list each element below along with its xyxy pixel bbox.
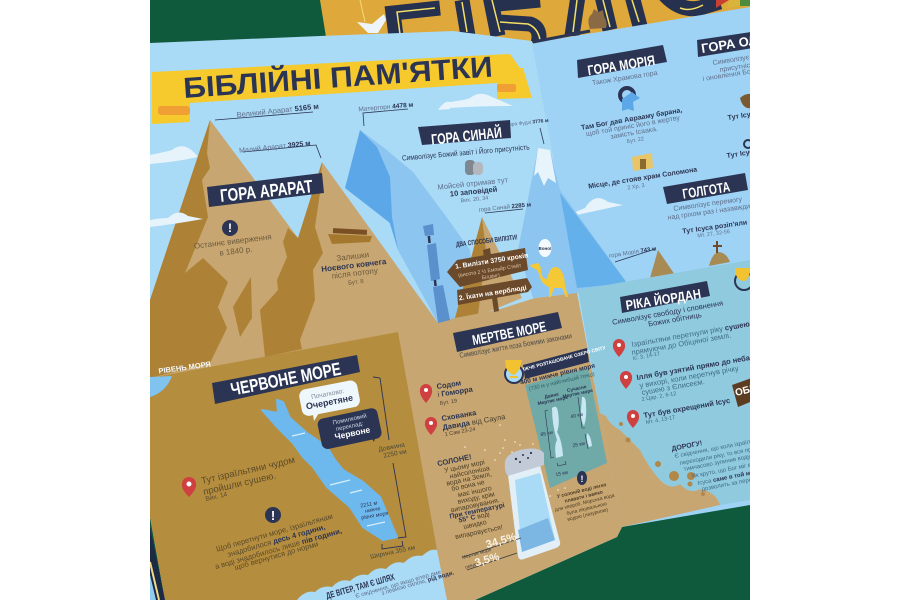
panel: Dead Sea xyxy=(420,312,615,571)
text: baptism: Мт. 4, 13-17 xyxy=(645,415,676,426)
text: crucifixion: Мт. 27, 32-56 xyxy=(697,229,730,239)
bubble: mistranslated: Помилковий xyxy=(332,413,367,427)
heading: two ways to climb: ДВА СПОСОБИ ВИЛІЗТИ! xyxy=(456,234,518,249)
text: Noah's ark remains: Ноєвого ковчега xyxy=(321,257,387,274)
label: Moriah height: гора Морія 743 м xyxy=(609,246,657,260)
pin: Sodom xyxy=(420,384,432,403)
text: salty: бо вона не xyxy=(451,478,486,493)
text: salt water note: водою (лазурною) xyxy=(567,507,609,523)
label: Fuji height: гора Фудзі 3776 м xyxy=(507,118,549,128)
text: salty: У цьому морі xyxy=(443,458,486,475)
text: David's hideout: Схованка xyxy=(441,408,478,423)
right page sky xyxy=(532,7,750,527)
title: БІБЛІЙНІ ПАМ'ЯТКИ xyxy=(182,49,494,105)
text: salty: випаровується! xyxy=(455,524,504,541)
text: Abraham's ram: Бут. 22 xyxy=(626,136,645,145)
green table background xyxy=(150,0,750,600)
icon: exclamation Dead Sea: ! xyxy=(580,474,584,484)
stat: Dead Sea salinity xyxy=(461,531,521,561)
text: salty: швидко xyxy=(463,519,488,531)
text: Noah's ark remains: Залишки xyxy=(336,250,370,263)
text: Solomon's temple: 2 Хр. 3 xyxy=(627,183,645,192)
text: Abraham's ram: щоб той приніс його в жертву xyxy=(585,114,681,138)
text: Abraham's ram xyxy=(580,106,687,153)
chart: ancient Dead Sea: 15 км xyxy=(555,470,569,478)
mountain height labels xyxy=(215,109,655,262)
stat: Dead Sea salinity: 34,5% xyxy=(485,531,518,551)
text: Sodom: Бут. 19 xyxy=(439,398,457,407)
banner: Golgotha: ГОЛГОТА xyxy=(681,178,731,202)
text: salty: вода на Землі, xyxy=(446,470,493,488)
text: Israelites crossed: Ізраїльтяни перетнули ріку сушею, xyxy=(631,319,752,349)
text: Jesus here: Тут Ісус xyxy=(727,111,755,122)
text: Moses commandments xyxy=(437,175,511,207)
pin 3 xyxy=(627,410,639,428)
icon: salt shaker xyxy=(505,449,560,560)
cloud over Ararat xyxy=(150,212,203,227)
text: Dead Sea symbolism: Символізує життя поза Божими законами xyxy=(459,331,572,360)
brown tag xyxy=(732,375,760,407)
bubble: originally xyxy=(298,379,361,421)
panel: where there is wind: з певною силою, рід води. xyxy=(381,570,455,597)
text: baptism: Тут був охрещений Ісус xyxy=(643,396,731,420)
text: Abraham's ram: Там Бог дав Аврааму барана, xyxy=(580,106,683,132)
banner: Mount of Olives: ГОРА ОЛИВНА xyxy=(700,26,796,56)
signpost: Білдінг) xyxy=(481,273,501,281)
text: crossed on dry land: Вих. 14 xyxy=(205,491,228,503)
text: salty: має іншого xyxy=(457,484,493,499)
text: crossing time: знадобилося десь 4 години, xyxy=(226,522,326,559)
text: salty: випаровування. xyxy=(450,497,501,514)
panel: Jordan river xyxy=(578,260,770,527)
icon: trophy xyxy=(505,360,523,383)
level label: sea level: РІВЕНЬ МОРЯ xyxy=(158,359,211,376)
text: crossed on dry land: пройшли сушею. xyxy=(202,470,277,498)
stat: ocean salinity: 3,5% xyxy=(473,551,501,569)
length dimension: 2250 км xyxy=(383,448,408,460)
text: Golgotha symbolism: над гріхом раз і назавжди xyxy=(667,202,751,222)
note: road xyxy=(671,436,770,493)
bubble: mistranslated: Червоне xyxy=(334,424,371,442)
note: road: Як круто, що Бог міг вчинити xyxy=(691,459,770,480)
text: Elijah: сушею з Єлисеєм. xyxy=(641,377,705,397)
text: Moses commandments: Вих. 20, 34 xyxy=(460,195,489,204)
text: Israelites crossed: прямуючи до Обіцяної землі. xyxy=(631,331,732,357)
icon: exclamation Ararat: ! xyxy=(228,221,232,235)
text: Israelites crossed: Іс. 3, 14-17 xyxy=(632,351,660,362)
text: Elijah xyxy=(636,353,751,403)
text: Golgotha symbolism: Символізує перемогу xyxy=(673,195,743,213)
text: salty: 55° С воді xyxy=(458,510,491,525)
banner: Red Sea: ЧЕРВОНЕ МОРЕ xyxy=(229,359,343,400)
text: salty: найсолоніша xyxy=(449,464,491,480)
text: Mount of Olives symbolism: і оновлення Божого xyxy=(702,65,766,83)
text: crossing time: а воді знадобилось лише пів години, xyxy=(214,526,343,571)
clouds xyxy=(150,94,623,218)
stat: ocean salinity xyxy=(464,551,517,571)
water cove xyxy=(150,376,172,397)
icon: exclamation Ararat xyxy=(222,220,238,236)
text: Sodom: Содом xyxy=(436,378,462,391)
title banner xyxy=(152,49,532,124)
bubble: originally: Очеретяне xyxy=(305,393,354,412)
brown tag: ОБІ xyxy=(734,384,754,399)
label: Matterhorn height: Матергорн 4478 м xyxy=(358,102,414,113)
note: road: ДОРОГУ! xyxy=(671,440,703,453)
icon: cup xyxy=(744,140,752,148)
width dimension: Ширина 355 км xyxy=(370,544,416,561)
text: Noah's ark remains xyxy=(320,248,389,290)
chart: modern Dead Sea: Сучасне xyxy=(567,385,587,394)
icon: ark xyxy=(328,228,372,244)
chart: ancient Dead Sea: 85 км xyxy=(540,430,554,438)
note: road: Є свідчення, що коли ізраїльтяни xyxy=(674,436,766,460)
text: Golgotha symbolism xyxy=(666,194,751,222)
Mount Ararat dark faces xyxy=(150,120,323,378)
text: salt water note: була лікувальною xyxy=(566,501,608,517)
chart: ancient Dead Sea: Давнє xyxy=(544,393,560,400)
text: last eruption: Останнє виверження xyxy=(193,232,272,251)
note: road: тимчасово зупинив воду. xyxy=(683,454,752,473)
chart: modern Dead Sea xyxy=(561,383,594,449)
text: Elijah: Ілля був узятий прямо до неба xyxy=(636,353,751,382)
icon: temple xyxy=(632,153,653,171)
text: salt water note: плавати і важко xyxy=(564,489,604,505)
note: road: дозволить за перетину xyxy=(701,475,765,493)
pin: David xyxy=(425,417,437,435)
text: salty xyxy=(436,452,506,541)
small mountains xyxy=(650,241,730,278)
text: Jesus here: Тут Ісус xyxy=(726,149,754,160)
chart: modern Dead Sea: 25 км xyxy=(572,441,586,449)
bubble: originally: Початково: xyxy=(311,388,345,401)
text: Elijah: 2 Цар. 2, 6-12 xyxy=(641,391,677,403)
icon: tablets xyxy=(465,160,483,175)
stat: ocean salinity: океан xyxy=(464,561,479,571)
panel: where there is wind: ДЕ ВІТЕР, ТАМ Є ШЛЯХ xyxy=(325,572,396,600)
length dimension: Довжина xyxy=(378,442,405,454)
text: Abraham's ram: замість Ісаака. xyxy=(610,125,658,141)
salt specks xyxy=(464,424,566,497)
map: Red Sea xyxy=(262,400,397,540)
label: Small Ararat height: Малий Арарат 3925 м xyxy=(239,139,311,155)
text: Noah's ark remains: Бут. 8 xyxy=(348,279,365,287)
signpost: 2. Їхати на верблюді xyxy=(458,284,527,302)
icon: camel: Воно! xyxy=(539,246,552,251)
text: crucifixion xyxy=(682,219,748,241)
text: Moses commandments: 10 заповідей xyxy=(449,184,498,198)
label: Big Ararat height: Великий Арарат 5165 м xyxy=(236,102,320,119)
book page edge stripes xyxy=(150,527,165,600)
icon: camel xyxy=(530,239,568,297)
label: Mount Sinai height: гора Синай 2285 м xyxy=(478,201,532,214)
signpost: (висота 2 ½ Емпайр Стейт xyxy=(458,262,522,279)
text: 400 m below: 400 м нижче рівня моря xyxy=(519,362,596,387)
text: Sinai symbolism: Символізує Божий завіт і Його присутність xyxy=(402,142,530,163)
text: Mount of Olives symbolism xyxy=(702,50,768,83)
text: crossing time: Щоб перетнути море, ізраїльтянам xyxy=(215,512,334,554)
text: Solomon's temple: Місце, де стояв храм Соломона xyxy=(588,165,698,191)
banner: Jordan: РІКА ЙОРДАН xyxy=(625,286,702,313)
text: salty: виходу, крім xyxy=(457,490,496,506)
length dimension xyxy=(373,377,408,538)
text: Elijah: у вихорі, коли перетнув річку xyxy=(639,364,740,390)
icon: exclamation Red Sea xyxy=(265,507,281,523)
banner: lowest lake: НАЙНИЖЧЕ РОЗТАШОВАНЕ ОЗЕРО СВІТУ xyxy=(507,343,607,377)
left page sky xyxy=(150,31,622,600)
Matterhorn blue mountain xyxy=(345,130,480,323)
text: Jordan symbolism: Божих обітниць xyxy=(647,310,702,329)
tower comparison icon xyxy=(423,224,450,323)
text: David's hideout: 1 Сам 23-24 xyxy=(444,427,476,438)
text: David's hideout xyxy=(441,408,507,438)
banner: Mount Moriah: ГОРА МОРІЯ xyxy=(586,52,656,78)
banner: Mount Sinai xyxy=(418,120,511,149)
text: salt water note: У солоній воді легко xyxy=(556,481,607,500)
banner: Dead Sea: МЕРТВЕ МОРЕ xyxy=(471,318,547,348)
text: crossed on dry land: Тут ізраїльтяни чудом xyxy=(200,455,296,487)
ground left page xyxy=(150,120,622,600)
chart: ancient Dead Sea: Мертве море xyxy=(537,395,569,407)
text: Sodom: і Гоморра xyxy=(437,384,474,399)
note: road: переходили ріку, то вся прямо xyxy=(679,445,763,467)
text: Jordan symbolism: Символізує свободу і сповнення xyxy=(611,298,724,327)
signpost: 1. Вилізти 3750 кроків xyxy=(455,251,529,271)
signpost xyxy=(447,248,532,312)
text: salt water note xyxy=(554,481,615,523)
Sinai small peak xyxy=(455,217,522,318)
text: Jesus here xyxy=(726,111,755,160)
map: Red Sea: 2211 м xyxy=(360,501,378,509)
note: road: Ісуса саме в той момент xyxy=(697,466,768,487)
pin: Red Sea xyxy=(182,477,196,497)
banner: Mount Ararat: ГОРА АРАРАТ xyxy=(219,176,314,206)
chart: modern Dead Sea: Мертве море xyxy=(562,388,594,400)
snowy blue mountain xyxy=(518,148,627,298)
panel: Red Sea xyxy=(150,332,437,600)
text: crucifixion: Тут Ісуса розіп'яли xyxy=(682,219,748,236)
panel: where there is wind xyxy=(297,550,455,600)
text: Noah's ark remains: після потопу xyxy=(331,266,378,281)
text: crossing time: щоб вернутися до норми xyxy=(233,539,319,572)
text: Sodom xyxy=(436,378,474,407)
text: salt water note: для хвороб. Морська вода xyxy=(554,493,615,513)
text: salty: СОЛОНЕ! xyxy=(436,452,472,468)
book cover behind xyxy=(320,0,750,44)
map: Red Sea: рівня моря xyxy=(361,511,389,521)
stat: Dead Sea salinity: Мертве море xyxy=(461,547,492,561)
icon: exclamation Dead Sea xyxy=(577,471,587,485)
panel: where there is wind: Є свідчення, що якщо вітер дме xyxy=(355,569,443,600)
map: Red Sea: нижче xyxy=(365,506,381,515)
text: David's hideout: Давида від Саула xyxy=(442,412,507,432)
text: last eruption: в 1840 р. xyxy=(219,245,253,258)
shore dots xyxy=(619,422,705,496)
chart: modern Dead Sea: 40 км xyxy=(570,412,584,420)
icon: exclamation Red Sea: ! xyxy=(271,508,275,523)
chart: ancient Dead Sea xyxy=(536,390,569,478)
pin 2 xyxy=(620,371,632,389)
banner: Golgotha xyxy=(663,173,748,204)
text: salty: При температурі xyxy=(449,501,506,521)
text: crossed on dry land xyxy=(200,455,296,503)
text: Temple Mount: Також Храмова гора xyxy=(592,70,658,87)
icon: ram xyxy=(620,88,640,111)
icon: bowl xyxy=(740,94,752,108)
text: Mount of Olives symbolism: присутність xyxy=(719,60,758,74)
pin 1 xyxy=(613,339,625,357)
text: Israelites crossed xyxy=(631,319,752,362)
trophy icon xyxy=(735,268,753,290)
bubble: mistranslated: переклад: xyxy=(335,421,364,433)
spine top edge xyxy=(533,31,590,42)
text: deepest point: (730 м у найглибшій точці) xyxy=(528,371,595,393)
banner: Red Sea xyxy=(212,355,360,404)
banner: Mount Sinai: ГОРА СИНАЙ xyxy=(430,123,503,149)
text: Mount of Olives symbolism: Символізує Ісуса xyxy=(712,50,768,67)
banner: Dead Sea xyxy=(453,312,562,352)
text: Moses commandments: Мойсей отримав тут xyxy=(437,175,509,192)
teal info panel xyxy=(525,368,607,488)
bubble: mistranslated xyxy=(317,407,383,450)
tan shore xyxy=(600,413,720,527)
